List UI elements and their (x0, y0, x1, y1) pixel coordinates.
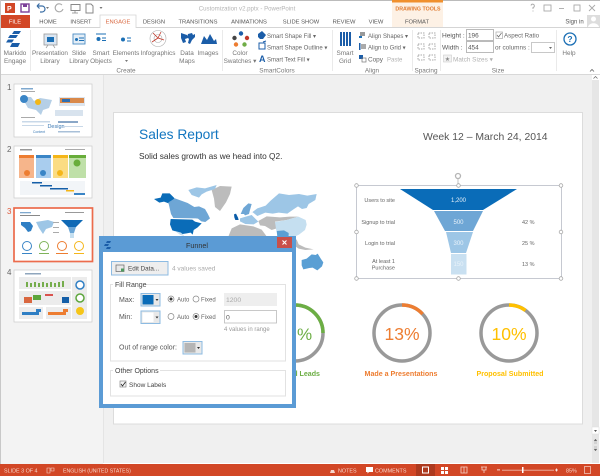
slide subtitle: Solid sales growth as we head into Q2. (139, 151, 282, 161)
user avatar (587, 15, 600, 27)
icon: smart shape fill (258, 31, 266, 39)
ring: qualified leads (267, 305, 323, 378)
min radio buttons (168, 314, 216, 321)
ribbon group: size: Height : (442, 32, 465, 40)
iceland and scandinavia (241, 203, 252, 215)
funnel stage: purchase: Purchase (372, 266, 395, 272)
icon: new file (86, 4, 93, 13)
ribbon group: align: Paste (387, 58, 403, 64)
icon: presentation library (44, 34, 57, 48)
uk (234, 214, 239, 220)
status bar: ENGLISH (UNITED STATES) (63, 468, 131, 474)
fill range group: Fill Range (115, 282, 147, 289)
fill range group (110, 281, 286, 361)
funnel stage: users to site: Users to site (364, 198, 395, 204)
icon: color swatches (232, 31, 249, 47)
icon: smart objects (96, 34, 106, 41)
thumbnail 2: 2 (7, 145, 12, 154)
columns dropdown (532, 42, 554, 52)
funnel stage: signup to trial: 500 (453, 220, 464, 226)
funnel dialog (99, 236, 296, 408)
icon: copy (359, 55, 366, 62)
thumbnail 1: Design (47, 124, 65, 130)
max colour swatch (141, 294, 160, 306)
ribbon group: create: Create (116, 68, 136, 74)
close button (277, 237, 292, 248)
ring: made a presentations: 13% (384, 324, 420, 344)
slide thumbnail panel (0, 0, 104, 476)
ring: made a presentations: Made a Presentations (365, 370, 438, 378)
ribbon group: create: Maps (179, 58, 195, 65)
icon: redo (55, 4, 63, 12)
icon: smart text fill: A (259, 54, 266, 64)
funnel stage: signup to trial: 42 % (522, 220, 535, 226)
ring: proposal submitted (476, 305, 544, 378)
ribbon group: smartcolors (224, 31, 327, 74)
title bar (0, 0, 600, 15)
show labels checkbox (120, 381, 167, 389)
ribbon group: align: Copy (368, 56, 384, 64)
icon: smart shape outline (259, 41, 266, 49)
ribbon group: smartcolors: Smart Shape Fill ▾ (267, 34, 316, 40)
thumbnail 3 selected (7, 207, 92, 262)
funnel chart (355, 174, 563, 280)
ribbon tabs: INSERT (70, 20, 92, 26)
show labels checkbox: Show Labels (129, 382, 167, 389)
india (277, 230, 289, 237)
ribbon group: align (336, 32, 408, 74)
fill range group: Out of range color: (119, 344, 177, 352)
min radio buttons: Fixed (201, 315, 216, 321)
ribbon group: align: Grid (339, 58, 351, 65)
max radio buttons: Fixed (201, 298, 216, 304)
australia (302, 254, 323, 270)
ribbon tabs: SLIDE SHOW (283, 20, 320, 26)
min radio buttons: Auto (177, 315, 190, 321)
status bar: NOTES (338, 468, 357, 474)
icon: notes (330, 470, 335, 473)
ring: qualified leads: d Leads (293, 370, 320, 378)
icon: elements (121, 38, 131, 42)
status bar (0, 464, 600, 476)
funnel stage: login to trial: 25 % (522, 241, 535, 247)
document title: Customization v2.pptx - PowerPoint (199, 6, 296, 12)
ribbon group: smartcolors: Smart Shape Outline ▾ (267, 46, 327, 52)
max radio buttons (168, 296, 216, 304)
funnel stage: purchase: 150 (453, 262, 464, 268)
funnel stage: users to site: 1,200 (451, 198, 467, 204)
file tab: FILE (9, 20, 21, 26)
ribbon group: align: Align Shapes ▾ (368, 34, 408, 40)
funnel stage: login to trial: Login to trial (365, 241, 395, 247)
funnel stage: login to trial: 300 (453, 241, 464, 247)
ribbon group: smartcolors: SmartColors (259, 68, 295, 74)
fill range group: Max: (119, 297, 134, 304)
match sizes button: Match Sizes ▾ (453, 56, 493, 64)
max input: 1200 (226, 297, 241, 304)
ring: made a presentations (365, 305, 438, 378)
funnel stage: signup to trial (361, 211, 535, 231)
values saved note: 4 values saved (172, 266, 216, 272)
icon: powerpoint logo (5, 3, 15, 13)
central asia (258, 216, 298, 230)
ribbon group: create (32, 30, 218, 74)
ribbon group: size: Width : (442, 44, 463, 52)
funnel stage: signup to trial: Signup to trial (361, 220, 395, 226)
aspect ratio checkbox: Aspect Ratio (504, 32, 540, 40)
ribbon tabs (0, 15, 600, 74)
ribbon group: help: Help (562, 50, 576, 57)
ribbon group: help: ? (567, 34, 573, 44)
thumbnail 1 (7, 83, 92, 137)
thumbnail 3 selected: 3 (7, 207, 12, 216)
icon: undo (37, 4, 49, 12)
zoom slider: 85% (566, 468, 577, 474)
ribbon group: create: Data (180, 50, 194, 57)
funnel stage: users to site (364, 189, 517, 210)
world map (154, 185, 323, 270)
ribbon group: markido engage: Markido (4, 50, 27, 57)
slide canvas (114, 112, 582, 424)
view buttons (416, 464, 487, 476)
ribbon tabs: REVIEW (333, 20, 356, 26)
thumbnail 1: Content (33, 130, 45, 134)
ribbon tabs: HOME (39, 20, 57, 26)
ring: proposal submitted: Proposal Submitted (476, 370, 544, 378)
out of range swatch (183, 342, 202, 354)
ribbon group: spacing (414, 33, 438, 74)
icon: smart grid (340, 32, 351, 46)
status bar: SLIDE 3 OF 4 (4, 468, 38, 474)
ribbon group: smartcolors: Color (232, 50, 249, 57)
ring: proposal submitted: 10% (491, 324, 527, 344)
ribbon group: create: Library (69, 58, 90, 65)
icon: presenter view (71, 4, 80, 13)
editing workspace (104, 75, 592, 463)
ribbon group: create: Objects (90, 58, 112, 65)
icon: comments (366, 467, 373, 474)
height input: 196 (468, 32, 479, 40)
status bar: COMMENTS (375, 468, 407, 474)
match sizes button: ★ (445, 56, 450, 63)
other options group (110, 367, 286, 396)
slide title: Sales Report (139, 127, 219, 142)
ring: qualified leads: % (297, 325, 312, 344)
ribbon group: align: Smart (336, 50, 354, 57)
icon: align shapes (359, 32, 365, 38)
values in range note: 4 values in range (224, 327, 270, 333)
ribbon group: spacing: Spacing (414, 68, 438, 74)
icon: save (21, 4, 29, 12)
drawing tools contextual tab: FORMAT (405, 20, 429, 26)
icon: customize toolbar (100, 7, 102, 9)
ribbon group: markido engage (4, 31, 27, 65)
ribbon group: size: Size (492, 68, 505, 74)
drawing tools contextual tab: DRAWING TOOLS (395, 6, 441, 12)
ribbon group: create: Images (198, 50, 218, 57)
ribbon group: create: Slide (72, 50, 87, 57)
europe (240, 215, 258, 224)
ribbon tabs: DESIGN (143, 20, 165, 26)
ribbon group: create: Presentation (32, 50, 68, 57)
icon: align to grid (359, 43, 366, 50)
max radio buttons: Auto (177, 298, 190, 304)
icon: data maps (181, 33, 195, 44)
greenland (212, 186, 232, 211)
funnel stage: purchase (372, 254, 535, 274)
file tab (0, 15, 30, 28)
ribbon tabs: ANIMATIONS (231, 20, 267, 26)
ribbon group: size: or columns : (495, 44, 530, 52)
funnel stage: purchase: At least 1 (372, 259, 395, 265)
icon: spell check (47, 468, 54, 473)
slide date: Week 12 – March 24, 2014 (423, 132, 548, 143)
drawing tools contextual tab (392, 0, 443, 27)
dialog title: Funnel (186, 241, 208, 250)
rotation handle (456, 174, 460, 186)
vertical scrollbar (592, 75, 599, 463)
ribbon group: align: Align (365, 68, 380, 74)
engage active tab (100, 15, 136, 28)
usa (170, 219, 202, 235)
ribbon group: markido engage: Engage (4, 58, 26, 65)
icon: powerpoint logo: P (7, 6, 12, 13)
min input: 0 (226, 314, 230, 322)
southern europe and north africa (228, 224, 267, 237)
ribbon group: create: Library (40, 58, 61, 65)
thumbnail 4 (7, 268, 92, 322)
thumbnail 1: 1 (7, 83, 12, 92)
width input: 454 (468, 44, 479, 52)
edit data button (112, 262, 168, 275)
ribbon group: help (562, 33, 594, 72)
thumbnail 4: 4 (7, 268, 12, 277)
zoom slider (497, 466, 590, 474)
ribbon group: smartcolors: Smart Text Fill ▾ (267, 58, 310, 64)
edit data button: Edit Data... (128, 266, 159, 272)
min colour swatch (141, 311, 160, 324)
icon: dialog logo (104, 241, 111, 249)
icon: markido (6, 31, 21, 47)
ribbon group: create: Infographics (141, 50, 175, 57)
min input (224, 310, 276, 323)
ribbon group: align: Align to Grid ▾ (368, 46, 406, 52)
china (275, 217, 307, 237)
max input (224, 293, 277, 306)
fill range group: Min: (119, 314, 132, 321)
russia (251, 193, 317, 216)
icon: images (201, 34, 217, 44)
ribbon tabs: TRANSITIONS (179, 20, 218, 26)
southeast asia (293, 238, 314, 250)
selection handles (355, 184, 563, 280)
window controls (531, 4, 595, 12)
ribbon group: create: Elements (113, 50, 139, 57)
alaska (154, 193, 175, 203)
ribbon tabs: VIEW (369, 20, 384, 26)
mexico (175, 231, 184, 236)
icon: infographics (150, 30, 166, 46)
ribbon tabs: Sign in (565, 20, 584, 26)
engage active tab: ENGAGE (106, 20, 131, 26)
icon: spacing buttons (418, 33, 435, 60)
thumbnail 2 (7, 145, 92, 198)
ribbon group: create: Smart (92, 50, 110, 57)
icon: slide library (73, 34, 85, 44)
funnel stage: purchase: 13 % (522, 262, 535, 268)
canada (168, 198, 210, 222)
funnel stage: login to trial (365, 232, 535, 253)
ribbon group: smartcolors: Swatches ▾ (224, 58, 256, 65)
other options group: Other Options (115, 368, 159, 375)
canadian arctic (188, 185, 217, 198)
ribbon group: size (442, 30, 554, 74)
match sizes button (444, 55, 493, 64)
